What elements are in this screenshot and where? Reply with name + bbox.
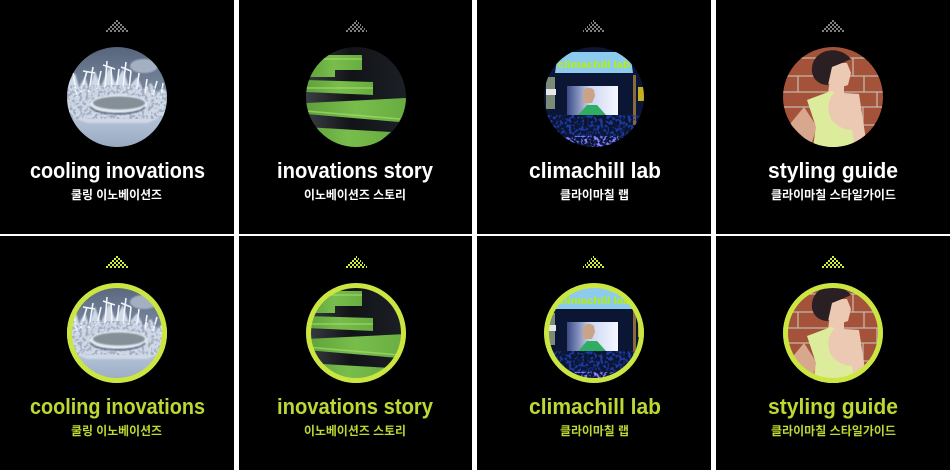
subheading: 쿨링 이노베이션즈 [71, 188, 162, 202]
panel: inovations story [277, 20, 434, 202]
heading: inovations story [277, 158, 434, 183]
icon: triangle [822, 256, 844, 268]
subheading: 클라이마칠 랩 [560, 423, 629, 438]
heading: styling guide [768, 158, 898, 183]
heading: styling guide [768, 394, 898, 419]
icon: triangle [583, 20, 605, 32]
panel: climachill lab hover [529, 256, 661, 438]
heading: climachill lab [529, 158, 661, 183]
subheading: 쿨링 이노베이션즈 [71, 424, 162, 438]
photo: climachill lab storefront: climachill lab [558, 60, 630, 71]
photo: woman by brick wall with ring [783, 283, 883, 387]
icon: triangle [583, 256, 605, 268]
photo: green fabric strips [306, 47, 406, 149]
panel: cooling inovations hover [30, 256, 205, 438]
panel: climachill lab [529, 20, 661, 202]
heading: inovations story [277, 394, 434, 419]
photo: frost crystals [67, 47, 167, 147]
photo: green fabric strips with ring [306, 283, 406, 385]
photo: climachill lab storefront [544, 47, 644, 147]
photo: woman by brick wall [783, 47, 883, 151]
icon: triangle [106, 256, 128, 268]
panel: styling guide hover [768, 256, 898, 438]
photo: climachill lab storefront with ring: climachill lab [558, 296, 630, 307]
subheading: 클라이마칠 스타일가이드 [771, 187, 896, 202]
icon: triangle [345, 20, 367, 32]
heading: cooling inovations [30, 394, 205, 419]
subheading: 이노베이션즈 스토리 [304, 188, 406, 202]
panel: cooling inovations [30, 20, 205, 202]
subheading: 클라이마칠 랩 [560, 187, 629, 202]
icon: triangle [106, 20, 128, 32]
icon: triangle [345, 256, 367, 268]
heading: cooling inovations [30, 158, 205, 183]
photo: frost crystals with ring [67, 283, 167, 383]
icon: triangle [822, 20, 844, 32]
panel: styling guide [768, 20, 898, 202]
subheading: 이노베이션즈 스토리 [304, 424, 406, 438]
subheading: 클라이마칠 스타일가이드 [771, 423, 896, 438]
heading: climachill lab [529, 394, 661, 419]
photo: climachill lab storefront with ring [544, 283, 644, 383]
panel: inovations story hover [277, 256, 434, 438]
